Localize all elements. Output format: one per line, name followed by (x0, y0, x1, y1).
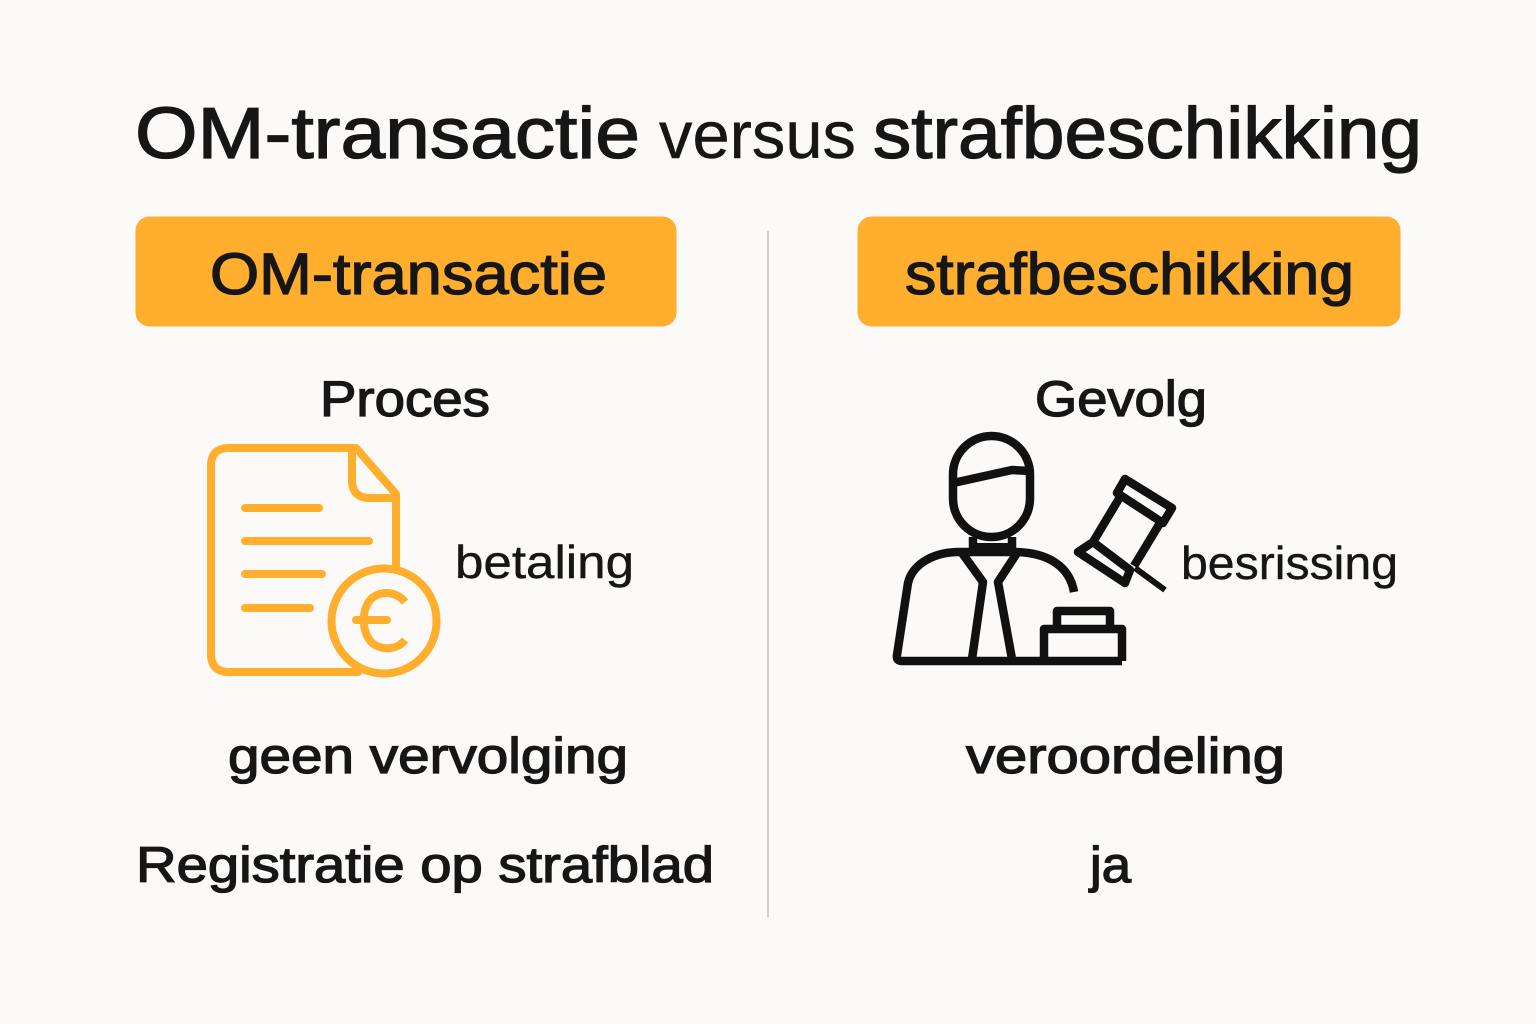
label: Gevolg: Gevolg (1035, 371, 1207, 427)
label: geen vervolging: geen vervolging (228, 728, 628, 784)
title: OM-transactie (135, 94, 640, 174)
label: betaling: betaling (455, 536, 634, 588)
title (135, 94, 1422, 174)
icon: document with euro coin (211, 448, 436, 674)
label: Proces: Proces (320, 371, 490, 427)
panel: OM-transactie (136, 216, 714, 893)
panel: strafbeschikking (858, 216, 1400, 893)
label: besrissing: besrissing (1181, 537, 1398, 589)
label: veroordeling: veroordeling (966, 728, 1285, 784)
label: Registratie op strafblad: Registratie op strafblad (136, 837, 714, 893)
label: ja: ja (1088, 837, 1131, 893)
heading: OM-transactie: OM-transactie (210, 242, 607, 307)
title: versus (659, 98, 856, 173)
heading: OM-transactie (136, 216, 676, 326)
heading: strafbeschikking (858, 216, 1400, 326)
heading: strafbeschikking: strafbeschikking (905, 242, 1354, 307)
icon: judge with gavel (897, 436, 1172, 661)
title: strafbeschikking (873, 94, 1422, 174)
